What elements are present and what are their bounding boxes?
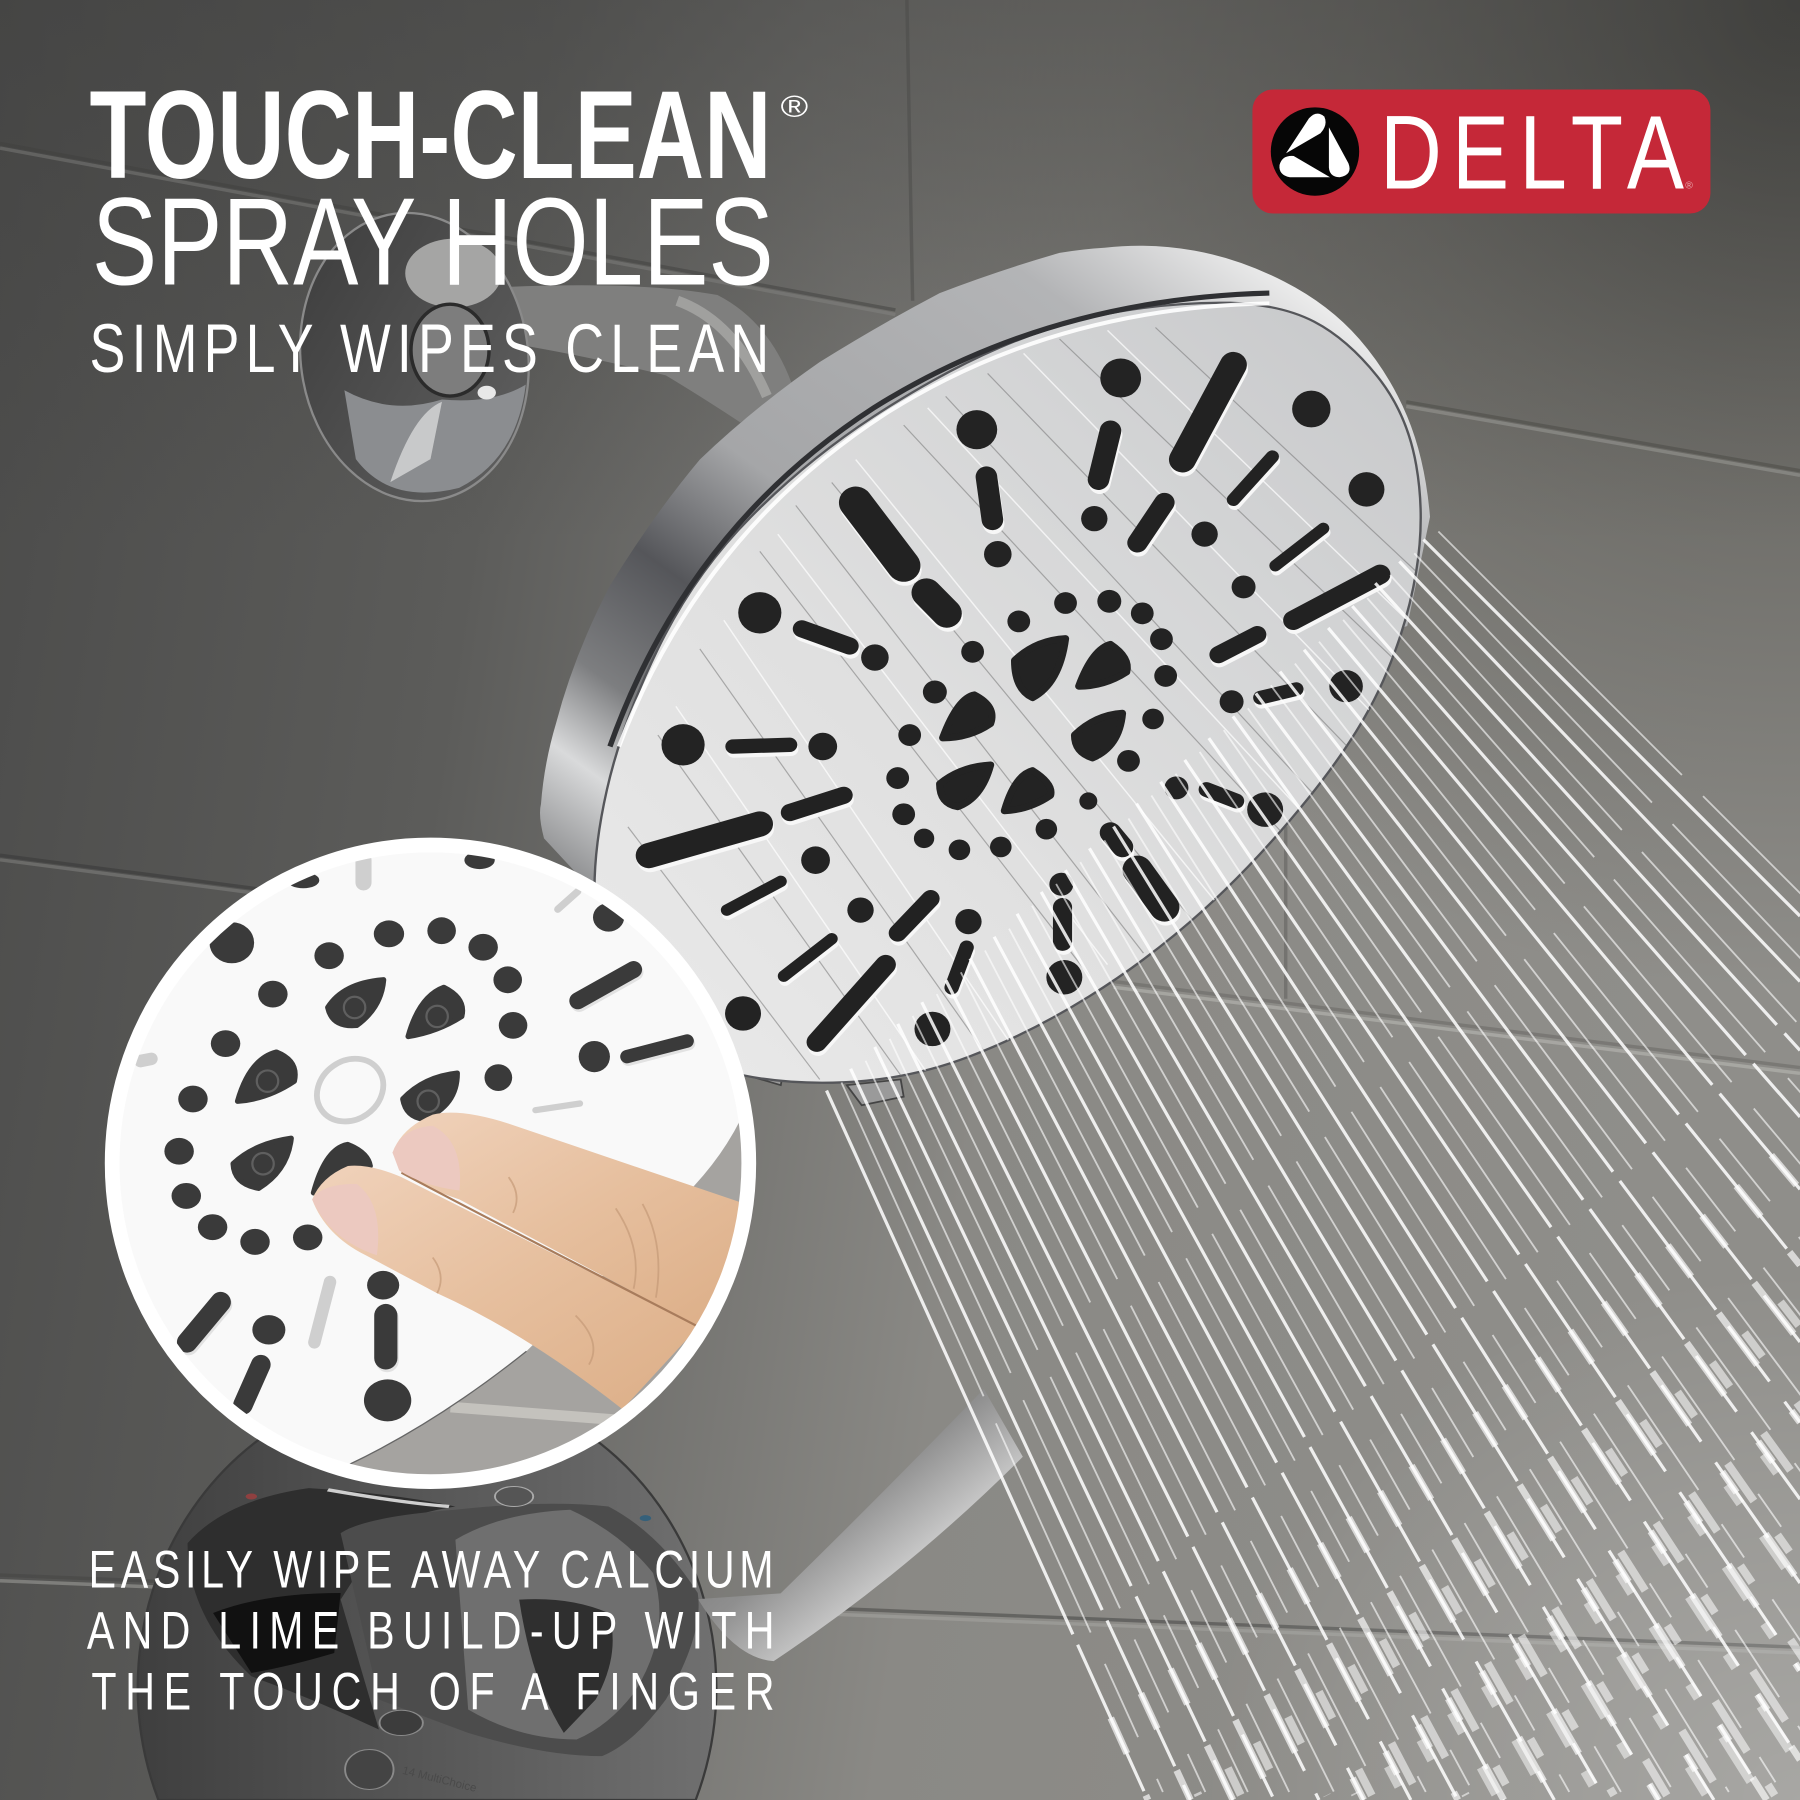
brand logo: Delta: ®: [1685, 180, 1693, 191]
brand logo: Delta: [1252, 90, 1710, 214]
shower head underside clips: [742, 1051, 904, 1105]
body text: EASILY WIPE AWAY CALCIUM: [89, 1541, 774, 1600]
shower head chrome rim: [540, 246, 1430, 890]
body text: [87, 1541, 775, 1722]
wall flange and shower arm: [282, 198, 792, 516]
title: TOUCH-CLEAN: ®: [781, 89, 808, 124]
fingers: [312, 1113, 745, 1409]
title: TOUCH-CLEAN: TOUCH-CLEAN: [90, 65, 771, 205]
body text: THE TOUCH OF A FINGER: [91, 1662, 775, 1722]
inset photo contents: [116, 849, 762, 1478]
inset circle: finger wiping the spray holes: [112, 845, 762, 1482]
shower head face: [594, 293, 1421, 1083]
shower head: [540, 246, 1430, 1105]
water spray streams: [804, 532, 1800, 1800]
valve trim plate, handle and lever: [138, 1383, 1023, 1800]
subtitle: SPRAY HOLES: SPRAY HOLES: [92, 174, 774, 312]
small engraved plate text: 14 MultiChoice: [401, 1765, 478, 1795]
brand logo: Delta: DELTA: [1380, 95, 1684, 211]
white circle ring: [112, 845, 749, 1482]
tagline: SIMPLY WIPES CLEAN: SIMPLY WIPES CLEAN: [90, 311, 769, 388]
shower head spray nozzles: [649, 359, 1384, 1046]
body text: AND LIME BUILD-UP WITH: [87, 1602, 775, 1661]
